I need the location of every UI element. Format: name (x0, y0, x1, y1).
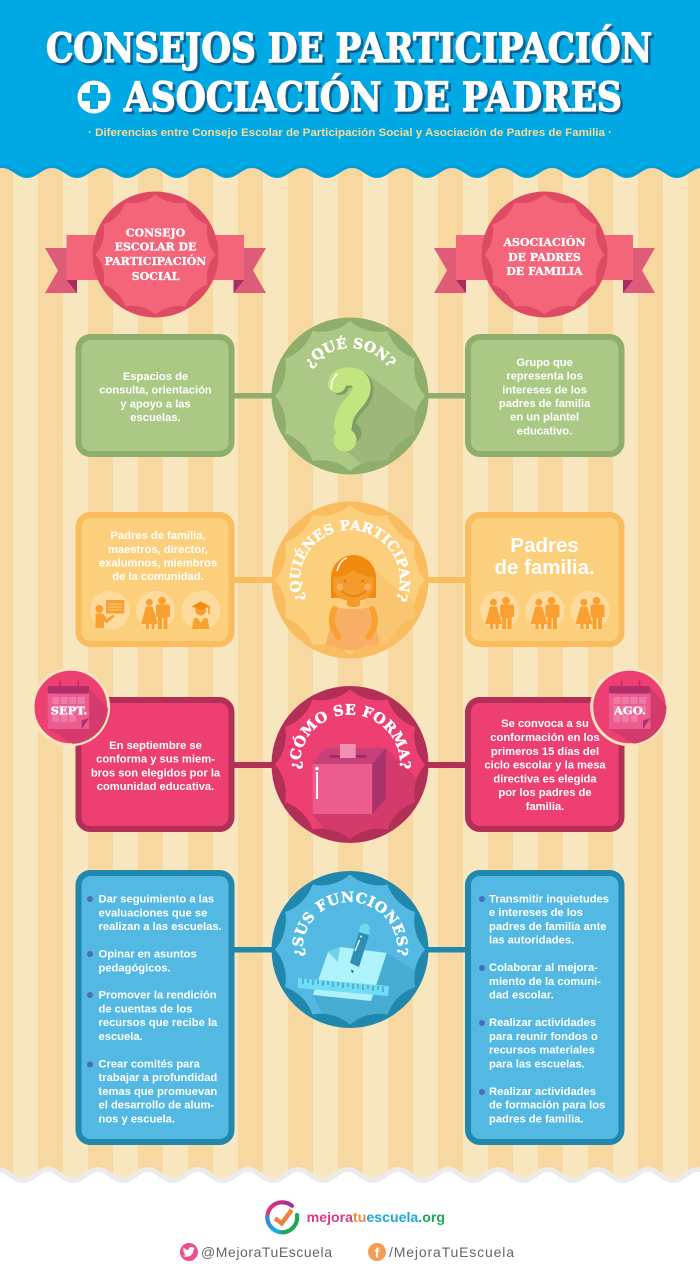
box: funciones asociacion: Colaborar al mejora- (489, 962, 598, 974)
heading: sus funciones: ¿SUS FUNCIONES? (292, 891, 408, 956)
box: que son consejo (78, 337, 232, 454)
footer white wave (0, 1170, 700, 1280)
box: funciones consejo: escuela. (98, 1031, 143, 1043)
box: que son consejo: Espacios de (123, 371, 188, 383)
box: quienes asociacion: de familia. (494, 556, 595, 579)
box: funciones consejo: Opinar en asuntos (98, 949, 197, 961)
heading: como se forma: ¿CÓMO SE FORMA? (290, 704, 411, 769)
box: como consejo (78, 700, 232, 829)
logo: mejoratuescuela: mejoratuescuela.org (307, 1210, 445, 1225)
box: funciones consejo: pedagógicos. (98, 962, 171, 974)
box: que son asociacion (468, 337, 622, 454)
badge: consejo escolar (45, 192, 266, 318)
title: ASOCIACIÓN DE PADRES (123, 74, 622, 121)
panel: sus funciones (76, 870, 624, 1145)
box: funciones consejo: el desarrollo de alum- (98, 1100, 214, 1112)
medallion: sus funciones (272, 871, 428, 1028)
icon: graduate (182, 591, 220, 630)
box: funciones asociacion: recursos materiales (489, 1045, 595, 1057)
box: que son asociacion: Grupo que (516, 357, 573, 369)
box: funciones asociacion: las autoridades. (489, 935, 574, 947)
badge: consejo escolar: ESCOLAR DE (115, 240, 196, 254)
box: funciones consejo: nos y escuela. (98, 1114, 175, 1126)
social: facebook: /MejoraTuEscuela (389, 1244, 514, 1260)
box: funciones consejo (78, 873, 232, 1142)
box: que son asociacion: representa los (506, 370, 583, 382)
badge: consejo escolar: PARTICIPACIÓN (105, 254, 206, 268)
box: funciones consejo: de cuentas de los (98, 1003, 192, 1015)
box: funciones asociacion (468, 873, 622, 1142)
medallion: como se forma (272, 686, 428, 843)
box: quienes consejo: exalumnos, miembros (99, 558, 217, 570)
box: como asociacion: primeros 15 días del (491, 746, 599, 758)
panel: quienes participan (76, 502, 624, 658)
box: funciones consejo: Promover la rendición (98, 990, 217, 1002)
box: como asociacion: Se convoca a su (501, 718, 589, 730)
icon: girl (324, 555, 381, 650)
box: quienes consejo: Padres de familia, (110, 530, 206, 542)
box: funciones consejo: recursos que recibe la (98, 1017, 218, 1029)
header band with scalloped edge (0, 0, 700, 178)
icon: plus sign (78, 80, 110, 114)
box: que son consejo: escuelas. (130, 412, 181, 424)
heading: quienes participan: ¿QUIÉNES PARTICIPAN? (290, 520, 410, 602)
badge: asociacion de padres: DE PADRES (508, 251, 581, 264)
box: como consejo: comunidad educativa. (97, 781, 214, 793)
box: funciones asociacion: Transmitir inquietudes (489, 894, 609, 906)
icon: question mark (331, 374, 365, 452)
box: como asociacion: ciclo escolar y la mesa (484, 760, 606, 772)
heading: que son: ¿QUÉ SON? (307, 335, 396, 368)
badge: asociacion de padres (434, 192, 655, 318)
box: funciones asociacion: para reunir fondos o (489, 1031, 598, 1043)
box: que son consejo: y apoyo a las (120, 398, 191, 410)
box: que son asociacion: intereses de los (502, 384, 587, 396)
box: quienes consejo (78, 515, 232, 644)
box: funciones consejo: evaluaciones que se (98, 907, 207, 919)
box: funciones asociacion: padres de familia. (489, 1114, 584, 1126)
badge: consejo escolar: SOCIAL (132, 270, 180, 283)
box: funciones asociacion: para las escuelas. (489, 1058, 585, 1070)
medallion: quienes participan (272, 502, 428, 658)
box: funciones asociacion: de formación para los (489, 1100, 605, 1112)
title (46, 25, 654, 124)
box: que son asociacion: padres de familia (499, 398, 591, 410)
logo: mejoratuescuela (267, 1202, 445, 1232)
box: como asociacion: familia. (526, 801, 564, 813)
box: como consejo: En septiembre se (109, 740, 202, 752)
box: que son asociacion: educativo. (517, 426, 572, 438)
icon: paper, ruler and pencil (298, 924, 389, 1001)
box: funciones asociacion: Realizar actividades (489, 1017, 596, 1029)
social: twitter: @MejoraTuEscuela (201, 1244, 332, 1260)
box: quienes asociacion (468, 515, 622, 644)
icon: ballot box (313, 744, 386, 814)
box: como asociacion: directiva es elegida (493, 774, 597, 786)
title: ASOCIACIÓN DE PADRES (126, 76, 624, 124)
box: funciones asociacion: padres de familia ante (489, 921, 607, 933)
box: funciones consejo: trabajar a profundidad (98, 1072, 217, 1084)
badge: consejo escolar: CONSEJO (126, 226, 186, 240)
box: funciones asociacion: Realizar actividades (489, 1086, 596, 1098)
box: quienes consejo: maestros, director, (108, 544, 208, 556)
box: como consejo: bros son elegidos por la (91, 768, 221, 780)
icon: calendar agosto (590, 668, 666, 746)
box: funciones consejo: Crear comités para (98, 1058, 201, 1070)
subtitle: · Diferencias entre Consejo Escolar de Participación Social y Asociación de Padres de Familia · (88, 127, 612, 139)
box: como asociacion (468, 700, 622, 829)
icons: parents row (480, 591, 610, 630)
box: que son consejo: consulta, orientación (99, 384, 212, 396)
panel: como se forma (34, 668, 666, 843)
badge: asociacion de padres: ASOCIACIÓN (502, 235, 586, 249)
badge: asociacion de padres: DE FAMILIA (506, 265, 583, 278)
social: facebook: f (375, 1244, 380, 1260)
panel: que son (76, 318, 624, 474)
box: como asociacion: por los padres de (498, 787, 592, 799)
box: que son asociacion: en un plantel (510, 412, 579, 424)
box: como consejo: conforma y sus miem- (96, 754, 215, 766)
box: funciones consejo: realizan a las escuelas. (98, 921, 222, 933)
icon: calendar september (33, 669, 112, 752)
box: funciones asociacion: e intereses de los (489, 907, 583, 919)
icon: calendar september: SEPT. (51, 704, 87, 718)
medallion: que son (272, 318, 428, 474)
icon: parents (136, 591, 175, 630)
box: quienes asociacion: Padres (510, 534, 579, 557)
box: funciones consejo: Dar seguimiento a las (98, 894, 214, 906)
icon: calendar agosto: AGO. (613, 704, 646, 718)
box: como asociacion: conformación en los (490, 732, 600, 744)
icon: teacher (90, 591, 130, 630)
box: funciones consejo: temas que promuevan (98, 1086, 217, 1098)
box: funciones asociacion: dad escolar. (489, 990, 554, 1002)
box: quienes consejo: de la comunidad. (112, 571, 204, 583)
box: funciones asociacion: miento de la comuni- (489, 976, 601, 988)
